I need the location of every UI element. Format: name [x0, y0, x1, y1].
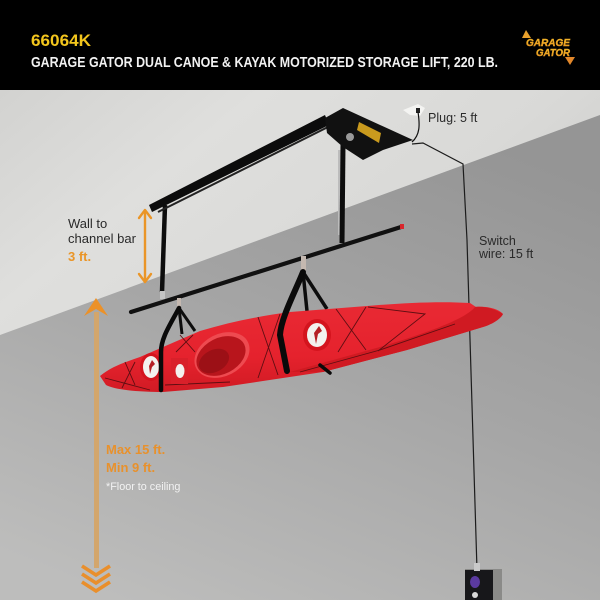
plug and power cord	[403, 104, 425, 142]
hanging strap: rear left	[160, 205, 165, 299]
kayak	[100, 302, 503, 392]
kayak hatch: rear	[303, 319, 331, 351]
model number: 66064K	[31, 32, 91, 50]
label: ceiling height range: *Floor to ceiling	[106, 481, 180, 493]
label: switch wire length: Switch	[479, 234, 516, 248]
label: plug length: Plug: 5 ft	[428, 111, 478, 125]
kayak hatch: small	[171, 358, 188, 384]
kayak cockpit	[187, 323, 257, 387]
panel: room ceiling	[0, 90, 600, 340]
label: wall to channel bar: Wall to	[68, 216, 107, 231]
hanging strap: rear right	[338, 145, 343, 243]
label: wall to channel bar: 3 ft.	[68, 249, 91, 264]
kayak lower hull shading	[290, 307, 503, 372]
product title: GARAGE GATOR DUAL CANOE & KAYAK MOTORIZED STORAGE LIFT, 220 LB.	[31, 54, 498, 71]
motor unit	[325, 108, 413, 160]
channel bar	[131, 224, 404, 312]
logo: Garage Gator: GATOR	[536, 48, 571, 59]
label: ceiling height range: Max 15 ft.	[106, 442, 165, 457]
lifting straps behind kayak	[177, 256, 327, 334]
wall switch	[465, 563, 502, 600]
kayak rigging lines	[105, 307, 455, 390]
label: wall to channel bar: channel bar	[68, 231, 137, 246]
panel: header bar	[0, 0, 600, 90]
switch wire	[412, 143, 477, 570]
label: ceiling height range	[106, 442, 180, 493]
label: ceiling height range: Min 9 ft.	[106, 460, 155, 475]
kayak hatch: front	[140, 353, 162, 381]
arrow: wall to channel bar	[139, 210, 151, 282]
label: switch wire length	[478, 234, 534, 261]
ceiling rail	[149, 115, 329, 212]
logo: Garage Gator: GARAGE	[526, 38, 570, 49]
label: switch wire length: wire: 15 ft	[478, 247, 534, 261]
label: wall to channel bar	[68, 216, 137, 264]
arrow: floor to ceiling height	[82, 298, 110, 591]
lifting straps around kayak	[161, 272, 330, 390]
logo: Garage Gator	[522, 30, 575, 65]
